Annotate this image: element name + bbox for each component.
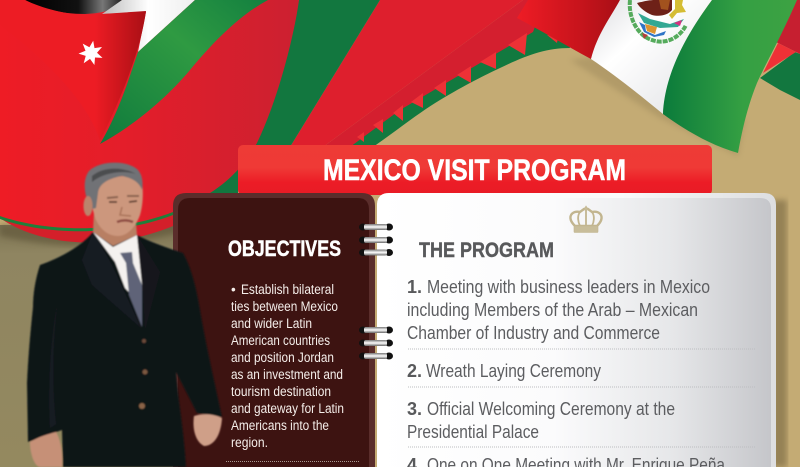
star bbox=[78, 41, 102, 65]
program item 1: including Members of the Arab – Mexican bbox=[407, 300, 698, 320]
Jordan flag bbox=[0, 0, 268, 144]
black stripe bbox=[25, 0, 122, 14]
fan band: green bbox=[200, 0, 380, 194]
bunting green band bbox=[340, 20, 570, 147]
green stripe bbox=[100, 0, 268, 144]
title: MEXICO VISIT PROGRAM bbox=[323, 154, 626, 187]
icon: upper binder rings bbox=[359, 224, 393, 256]
objectives text: and gateway for Latin bbox=[231, 401, 344, 416]
program item 1: 1. bbox=[407, 277, 422, 297]
program item 1: Chamber of Industry and Commerce bbox=[407, 323, 660, 343]
icon: crown bbox=[571, 206, 601, 232]
objectives text: Establish bilateral bbox=[241, 282, 334, 297]
program item 3: Presidential Palace bbox=[407, 422, 539, 442]
white stripe bbox=[102, 0, 195, 52]
objectives text: American countries bbox=[231, 333, 330, 348]
objectives text: tourism destination bbox=[231, 384, 331, 399]
left arm crease bbox=[49, 300, 58, 428]
objectives text bbox=[231, 282, 344, 450]
icon: lower binder rings bbox=[359, 326, 393, 360]
hair bbox=[85, 163, 143, 209]
fan band: upper red bbox=[290, 0, 523, 147]
figure: man in suit bbox=[27, 163, 222, 467]
objectives heading: OBJECTIVES bbox=[228, 236, 341, 261]
program item 3: 3. bbox=[407, 399, 422, 419]
panel: program page shadow bbox=[772, 200, 787, 467]
objectives text: and position Jordan bbox=[231, 350, 334, 365]
program item 1: Meeting with business leaders in Mexico bbox=[427, 277, 710, 297]
buttons bbox=[142, 339, 146, 343]
bunting red pennants bbox=[357, 33, 558, 142]
right hand bbox=[193, 414, 222, 446]
main red fan bbox=[0, 0, 299, 243]
program item 2: Wreath Laying Ceremony bbox=[426, 361, 601, 381]
panel: the program bbox=[377, 193, 776, 467]
nose bbox=[120, 207, 131, 216]
right-edge flag bands bbox=[760, 0, 800, 100]
objectives text: ties between Mexico bbox=[231, 299, 338, 314]
panel: objectives bbox=[173, 193, 375, 467]
objectives text: region. bbox=[231, 435, 268, 450]
tie bbox=[120, 252, 142, 327]
fan band: lower red bbox=[323, 0, 545, 147]
coat of arms bbox=[630, 0, 686, 42]
banner bbox=[238, 145, 712, 195]
Mexican flag bbox=[517, 0, 797, 156]
objectives text: Americans into the bbox=[231, 418, 329, 433]
lower left olive background bbox=[0, 225, 180, 467]
program item 2: 2. bbox=[407, 361, 422, 381]
mouth bbox=[117, 220, 133, 222]
shirt bbox=[93, 232, 142, 305]
program item 3 bbox=[407, 399, 675, 442]
neck bbox=[93, 212, 137, 246]
green stripe bbox=[663, 0, 797, 153]
red stripe bbox=[517, 0, 620, 59]
red fan lower shadow bbox=[0, 222, 180, 246]
objectives text: as an investment and bbox=[231, 367, 343, 382]
program item 1 bbox=[407, 277, 710, 343]
program item 3: Official Welcoming Ceremony at the bbox=[427, 399, 675, 419]
head bbox=[89, 175, 143, 236]
objectives text: • bbox=[231, 282, 236, 297]
ear bbox=[84, 196, 92, 216]
left hand bbox=[30, 432, 62, 467]
suit bbox=[27, 232, 222, 467]
program heading: THE PROGRAM bbox=[419, 238, 554, 262]
objectives text: and wider Latin bbox=[231, 316, 312, 331]
lapels bbox=[82, 232, 141, 328]
white stripe bbox=[591, 0, 712, 114]
red triangle bbox=[0, 0, 146, 141]
eyes bbox=[107, 196, 139, 198]
dark hair streak bbox=[92, 169, 136, 182]
